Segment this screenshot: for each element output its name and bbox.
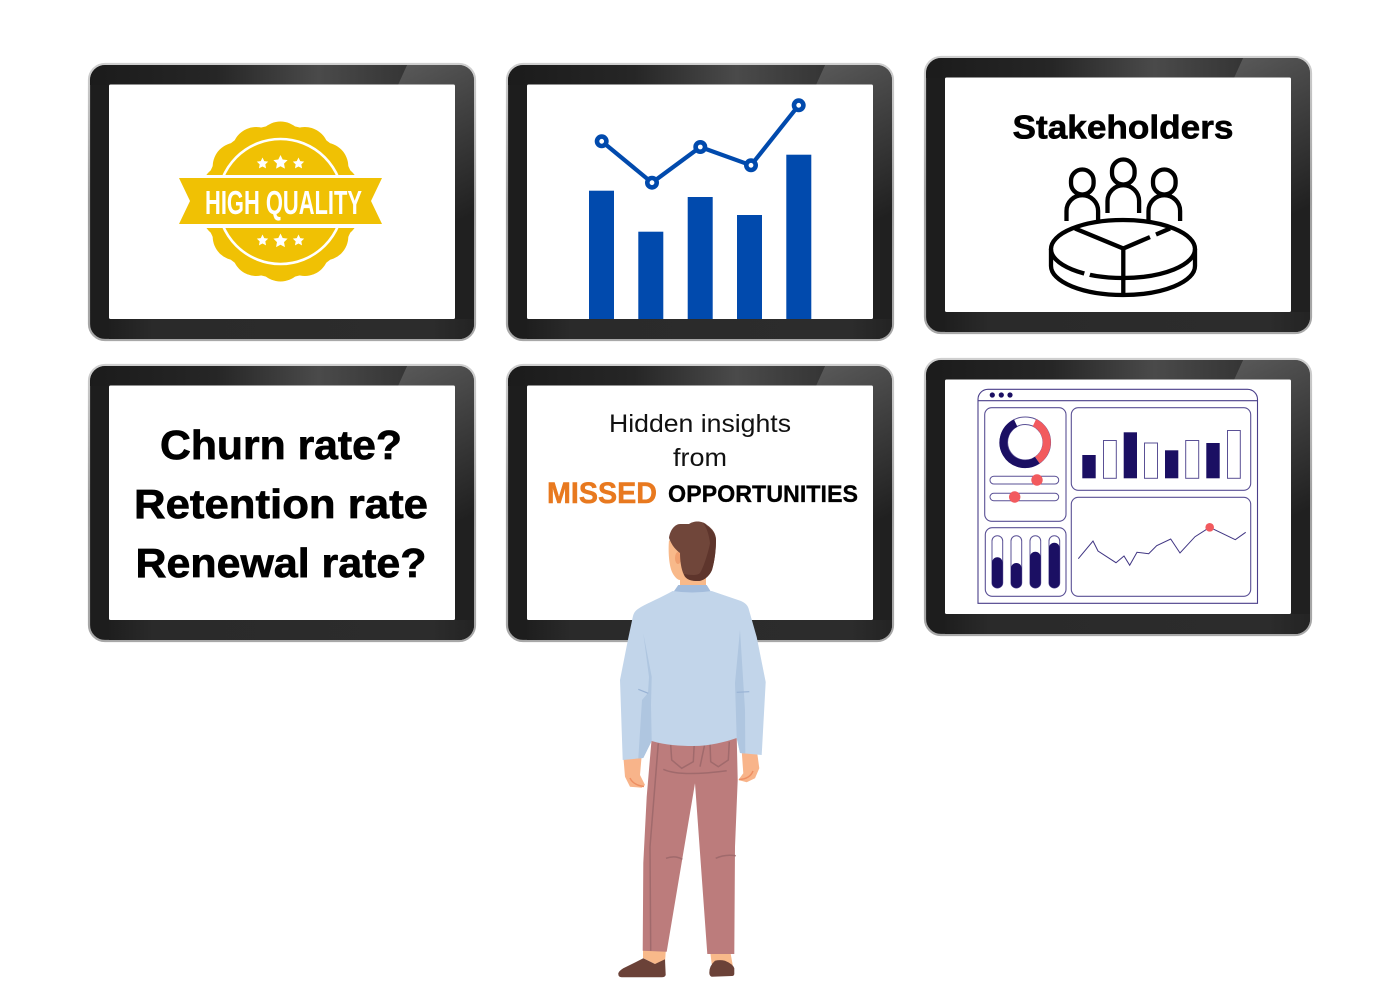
text block: rate questions: Churn rate? — [160, 422, 402, 468]
text block: hidden insights: OPPORTUNITIES — [668, 481, 858, 508]
trousers — [643, 736, 738, 954]
hair — [669, 522, 716, 581]
icon: high quality badge — [179, 122, 382, 282]
text block: rate questions: Renewal rate? — [136, 540, 426, 586]
shirt — [620, 585, 766, 760]
right hand — [738, 749, 759, 782]
figure: man viewing the screens from behind — [618, 522, 766, 977]
bar chart panel — [1071, 408, 1251, 490]
panel: stakeholders tablet — [924, 56, 1312, 334]
text block: hidden insights: MISSED — [547, 477, 657, 510]
icon: people around a table — [1051, 160, 1195, 295]
heading: Stakeholders: Stakeholders — [1012, 108, 1234, 146]
text block: hidden insights: from — [673, 444, 727, 472]
text block: rate questions: Retention rate — [134, 481, 428, 527]
vertical gauges panel — [985, 528, 1066, 596]
panel: hidden insights tablet — [506, 364, 894, 642]
neck and ear — [669, 540, 706, 592]
text block: hidden insights — [547, 410, 858, 510]
text block: hidden insights: Hidden insights — [609, 410, 791, 438]
dashboard window — [978, 389, 1258, 603]
bar chart — [589, 155, 811, 319]
left hand — [623, 755, 645, 788]
panel: high quality tablet — [88, 63, 476, 341]
panel: churn rate tablet — [88, 364, 476, 642]
text block: rate questions — [134, 422, 428, 586]
panel: dashboard tablet — [924, 358, 1312, 636]
donut and sliders panel — [985, 408, 1066, 521]
line chart panel — [1071, 497, 1251, 596]
right foot and shoe — [709, 950, 734, 977]
line chart — [597, 101, 803, 187]
left foot and shoe — [618, 948, 666, 977]
icon: high quality badge: HIGH QUALITY — [205, 184, 362, 221]
panel: chart tablet — [506, 63, 894, 341]
